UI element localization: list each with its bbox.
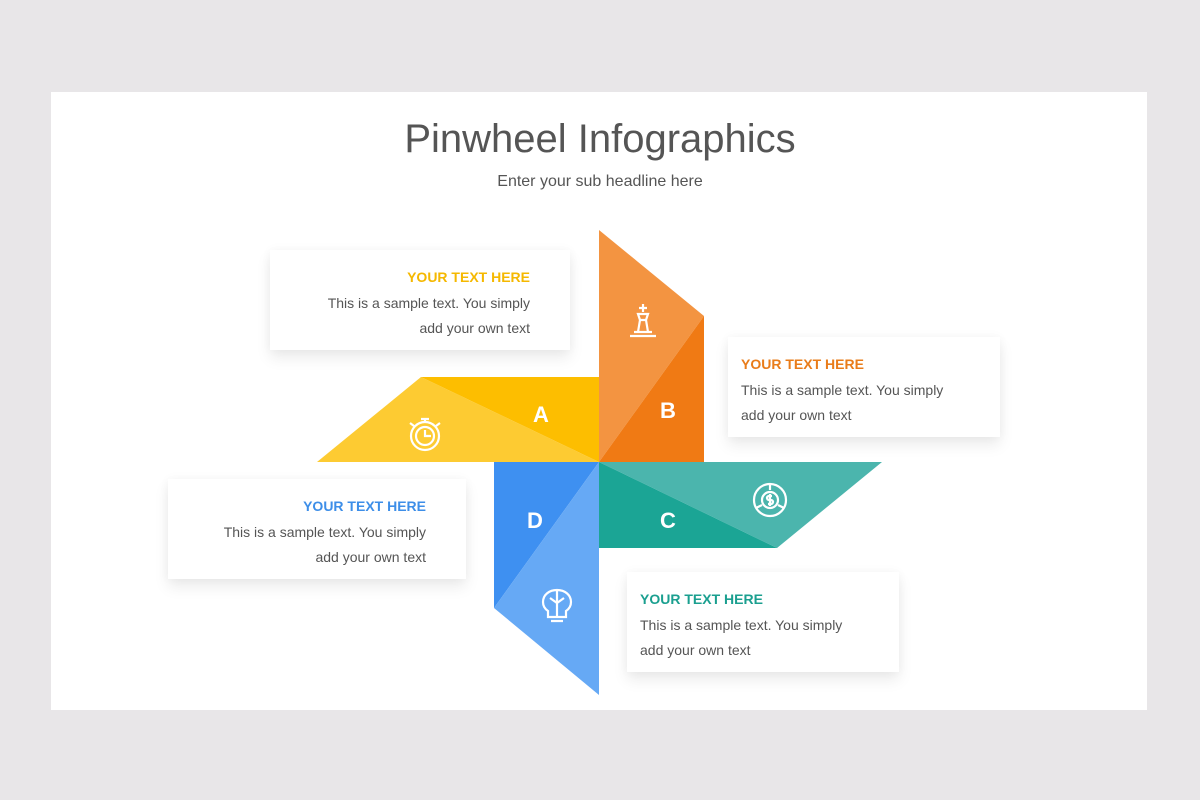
card B: YOUR TEXT HERE [741,356,864,372]
blade C: C [660,508,676,533]
card D [168,479,466,579]
card C: This is a sample text. You simply [640,617,842,633]
card B: add your own text [741,407,852,423]
subtitle: Enter your sub headline here [497,173,703,190]
card B: This is a sample text. You simply [741,382,943,398]
card A: This is a sample text. You simply [328,295,530,311]
card A: YOUR TEXT HERE [407,269,530,285]
blade C [599,462,882,548]
blade B: B [660,398,676,423]
icon: brain bulb [543,590,571,621]
card A: add your own text [419,320,530,336]
card B [728,337,1000,437]
card D: This is a sample text. You simply [224,524,426,540]
card A [270,250,570,350]
blade D: D [527,508,543,533]
blade B [599,230,704,462]
icon: stopwatch [410,419,440,450]
icon: chess king [630,304,656,336]
card C [627,572,899,672]
icon: money target [754,484,786,516]
card C: YOUR TEXT HERE [640,591,763,607]
blade A: A [533,402,549,427]
card D: add your own text [315,549,426,565]
title: Pinwheel Infographics [404,117,796,161]
blade D [494,462,599,695]
card D: YOUR TEXT HERE [303,498,426,514]
panel: slide background [51,92,1147,710]
card C: add your own text [640,642,751,658]
blade A [317,377,599,462]
